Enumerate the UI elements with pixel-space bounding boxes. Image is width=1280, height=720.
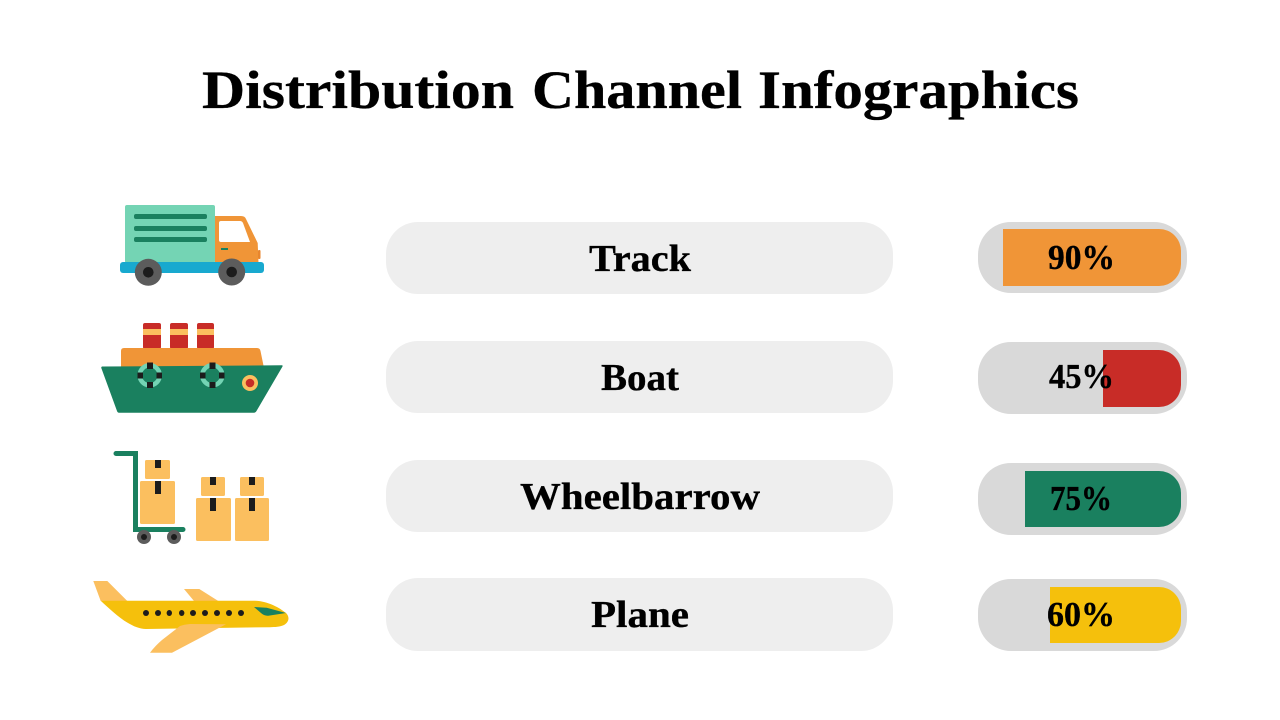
- progress meter: 60%: 60%: [1047, 595, 1115, 634]
- progress meter: 75%: [978, 463, 1187, 535]
- title: Channel: [532, 60, 742, 120]
- progress meter: 90%: [978, 222, 1187, 293]
- row: Track: [120, 205, 1187, 294]
- label pill: Wheelbarrow: [386, 460, 893, 532]
- progress meter: 45%: 45%: [1049, 357, 1114, 396]
- icon: plane: [93, 581, 288, 653]
- progress meter: 45%: [978, 342, 1187, 414]
- title: Distribution: [202, 60, 514, 120]
- label pill: Plane: [386, 578, 893, 651]
- icon: truck: [120, 205, 264, 286]
- row: Plane: [93, 578, 1187, 653]
- label: Boat: Boat: [601, 357, 679, 399]
- progress meter: 90%: 90%: [1048, 238, 1115, 277]
- label: Track: Track: [589, 238, 692, 280]
- progress meter: 60%: [978, 579, 1187, 651]
- progress meter: 75%: 75%: [1050, 479, 1112, 518]
- label pill: Track: [386, 222, 893, 294]
- label pill: Boat: [386, 341, 893, 413]
- label: Wheelbarrow: Wheelbarrow: [520, 476, 761, 518]
- row: Boat: [101, 323, 1187, 414]
- title: [202, 60, 1079, 120]
- icon: boat: [101, 323, 283, 413]
- title: Infographics: [758, 60, 1079, 120]
- label: Plane: Plane: [591, 594, 689, 636]
- icon: hand truck with boxes: [116, 454, 269, 544]
- row: Wheelbarrow: [116, 454, 1187, 544]
